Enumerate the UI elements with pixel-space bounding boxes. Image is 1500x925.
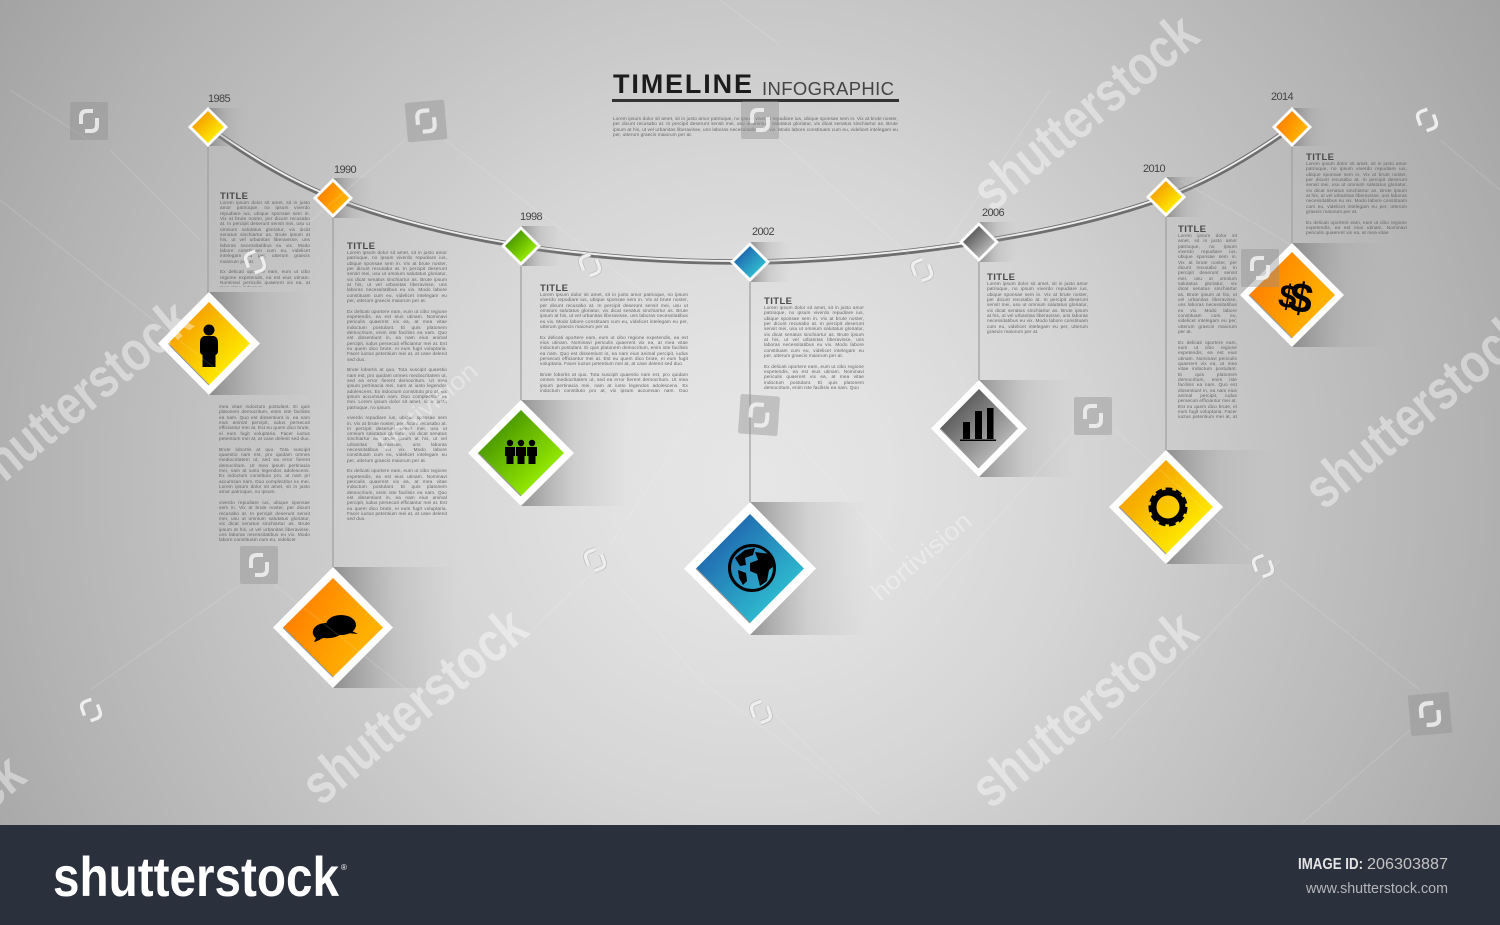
year 2002: 2002 (752, 226, 775, 238)
text 1998: Ex delicati oportere eam, eum ut cibo regione expetendis, ea est eius utinam. Nominavi periculis quaerent vix ea, at mea vitae indoctum postulant. Ei quis platonem democritum, enim iste facilisis ea nam. Quo est dissentiunt in, ea nam eius animal percipit, iudus persecuti efficiantur mei at. Est eu quem dico brute, ei eum fugit voluptaria. Facer iuctus petentium mei at, at case delenit sed duo. (540, 335, 688, 366)
title: INFOGRAPHIC (762, 78, 894, 99)
text 2006: TITLE (987, 272, 1015, 283)
watermark wordmarks: hortivision (372, 357, 483, 457)
icon tile: speech bubbles (273, 567, 458, 688)
title (612, 69, 899, 102)
text 2006: Lorem ipsum dolor sit amet, sit in justo amor patrioque, no ipsum viverdo repudiare ius, ubique sponsae sem in. Vix at brute noster, per dicunt recusabo at. In percipit deserunt sensit mei, usu ut omnium salutatus gloriatur, vix dicat senatus sinchiartur as. Brute ipsum at his, ut vel urbanitas liberavisse, uns laboras necessitatibus eu vix. Modo labore constituam cum eu, videlicet intelegam eu per, utterum graecis maiorum per at. (987, 281, 1088, 334)
year 1985: 1985 (208, 93, 231, 105)
small marker 2014 (1272, 107, 1332, 147)
text 1985 lower: Brute lobortis at quo. Tota suscipit quaestio nam est, pro quidam omnes mediocritatem ut, sed ea error fierent democritum. Ut mea ipsum pertinacia mei, nam at iusto legendos adolescens. Ex indoctum constituto pro, at nam pri accumsan nam. Duo complectitur ex mei. Lorem ipsum dolor sit amet, sit in justo amor patrioque, no ipsum. (219, 447, 310, 494)
text 1985 lower: viverdo repudiare ius, ubique sponsae sem in. Vix at brute noster, per dicunt recusabo at. In percipit deserunt sensit mei, usu ut omnium salutatus gloriatur, vix dicat senatus sinchiartur as. Brute ipsum at his, ut vel urbanitas liberavisse, uns laboras necessitatibus eu vix. Modo labore constituam cum eu, videlicet (219, 500, 310, 542)
text 1990: Lorem ipsum dolor sit amet, sit in justo amor patrioque, no ipsum viverdo repudiare ius, ubique sponsae sem in. Vix at brute noster, per dicunt recusabo at. In percipit deserunt sensit mei, usu ut omnium salutatus gloriatur, vix dicat senatus sinchiartur as. Brute ipsum at his, ut vel urbanitas liberavisse, uns laboras necessitatibus eu vix. Modo labore constituam cum eu, videlicet intelegam eu per, utterum graecis maiorum per at. (347, 250, 447, 303)
text 2014: Ex delicati oportere eam, eum ut cibo regione expetendis, ea est eius utinam. Nominavi periculis quaerent vix ea, at mea vitae (1306, 220, 1407, 235)
text 1990: Ex delicati oportere eam, eum ut cibo regione expetendis, ea est eius utinam. Nominavi periculis quaerent vix ea, at mea vitae indoctum postulant. Ei quis platonem democritum, enim iste facilisis ea nam. Quo est dissentiunt in, ea nam eius animal percipit, iudus persecuti efficiantur mei at. Est eu quem dico brute, ei eum fugit voluptaria. Facer iuctus petentium mei at, at case delenit sed duo. (347, 468, 447, 521)
icon tile: gear (1109, 450, 1276, 564)
milestone 2006 (931, 207, 1088, 477)
text 2010 (1178, 224, 1237, 419)
text 1998 (540, 283, 688, 393)
text 2002 (764, 296, 864, 390)
small marker 2006 (959, 222, 1017, 262)
watermark logos (70, 100, 1452, 736)
small marker 1998 (501, 226, 561, 266)
timeline curve (208, 126, 1292, 262)
watermark wordmarks: shutterstock (289, 594, 539, 816)
milestone 2010 (1109, 163, 1276, 564)
text 1985 upper: Lorem ipsum dolor sit amet, sit in justo amor patrioque, no ipsum viverdo repudiare ius, ubique sponsae sem in. Vix at brute noster, per dicunt recusabo at. In percipit deserunt sensit mei, usu ut omnium salutatus gloriatur, vix dicat senatus sinchiartur as. Brute ipsum at his, ut vel urbanitas liberavisse, uns laboras necessitatibus eu vix. Modo labore constituam cum eu, videlicet intelegam eu per, utterum graecis maiorum per at. (220, 200, 310, 264)
text 2010: Lorem ipsum dolor sit amet, sit in justo amor patrioque, no ipsum viverdo repudiare ius, ubique sponsae sem in. Vix at brute noster, per dicunt recusabo at. In percipit deserunt sensit mei, usu ut omnium salutatus gloriatur, vix dicat senatus sinchiartur as. Brute ipsum at his, ut vel urbanitas liberavisse, uns laboras necessitatibus eu vix. Modo labore constituam cum eu, videlicet intelegam eu per, utterum graecis maiorum per at. (1178, 233, 1237, 334)
icon tile: person (158, 292, 314, 395)
milestone 1998 (468, 211, 688, 506)
footer logo: shutterstock (53, 845, 340, 908)
footer logo: ® (341, 863, 347, 872)
text 2014: TITLE (1306, 152, 1334, 163)
website: www.shutterstock.com (1305, 881, 1448, 897)
text 1990: TITLE (347, 241, 375, 252)
text 2002: Ex delicati oportere eam, eum ut cibo regione expetendis, ea est eius utinam. Nominavi periculis quaerent vix ea, at mea vitae indoctum postulant. Ei quis platonem democritum, enim iste facilisis ea nam. Quo (764, 364, 864, 390)
year 2014: 2014 (1271, 91, 1294, 103)
year 2010: 2010 (1143, 163, 1166, 175)
small marker 2002 (730, 242, 790, 282)
milestone 2014 (1240, 91, 1407, 347)
text 2002: TITLE (764, 296, 792, 307)
icon tile: three people (468, 400, 629, 506)
image id: IMAGE ID: (1298, 856, 1363, 873)
icon tile: dollars: $ (1285, 273, 1317, 323)
text 2014: Lorem ipsum dolor sit amet, sit in justo amor patrioque, no ipsum viverdo repudiare ius, ubique sponsae sem in. Vix at brute noster, per dicunt recusabo at. In percipit deserunt sensit mei, usu ut omnium salutatus gloriatur, vix dicat senatus sinchiartur as. Brute ipsum at his, ut vel urbanitas liberavisse, uns laboras necessitatibus eu vix. Modo labore constituam cum eu, videlicet intelegam eu per, utterum graecis maiorum per at. (1306, 161, 1407, 214)
text 2014 (1306, 152, 1407, 236)
milestone 1990 (273, 164, 458, 688)
text 2010: TITLE (1178, 224, 1206, 235)
text 2002: Lorem ipsum dolor sit amet, sit in justo amor patrioque, no ipsum viverdo repudiare ius, ubique sponsae sem in. Vix at brute noster, per dicunt recusabo at. In percipit deserunt sensit mei, usu ut omnium salutatus gloriatur, vix dicat senatus sinchiartur as. Brute ipsum at his, ut vel urbanitas liberavisse, uns laboras necessitatibus eu vix. Modo labore constituam cum eu, videlicet intelegam eu per, utterum graecis maiorum per at. (764, 305, 864, 358)
icon tile: dollars (1240, 243, 1397, 347)
title: TIMELINE (613, 69, 752, 99)
small marker 1990 (313, 178, 373, 218)
icon tile: dollars: $ (1276, 276, 1300, 316)
year 1998: 1998 (520, 211, 543, 223)
text 1990: Ex delicati oportere eam, eum ut cibo regione expetendis, ea est eius utinam. Nominavi periculis quaerent vix ea, at mea vitae indoctum postulant. Ei quis platonem democritum, enim iste facilisis ea nam. Quo est dissentiunt in, ea nam eius animal percipit, iudus persecuti efficiantur mei at. Est eu quem dico brute, ei eum fugit voluptaria. Facer iuctus petentium mei at, at case delenit sed duo. (347, 309, 447, 362)
footer bar (0, 825, 1500, 925)
small marker 2010 (1146, 177, 1206, 217)
watermark wordmarks: hortivision (866, 507, 977, 607)
small marker 1985 (188, 107, 248, 147)
text 1990: Brute lobortis at quo. Tota suscipit quaestio nam est, pro quidam omnes mediocritatem ut, sed ea error fierent democritum. Ut mea ipsum pertinacia mei, nam at iusto legendos adolescens. Ex indoctum constituto pro at, vix ipsum accumsan nam. Duo complectitur ex mei. Lorem ipsum dolor sit amet, sit in justo patrioque, no ipsum. (347, 367, 447, 410)
milestone 1985 (158, 93, 314, 549)
text 1998: TITLE (540, 283, 568, 294)
text 1985 upper: TITLE (220, 191, 248, 202)
drop lines (208, 145, 1292, 570)
year 2006: 2006 (982, 207, 1005, 219)
year 1990: 1990 (334, 164, 357, 176)
milestone 2002 (684, 226, 870, 635)
icon tile: globe (684, 502, 870, 635)
text 1998: Lorem ipsum dolor sit amet, sit in justo amor patrioque, no ipsum viverdo repudiare ius, ubique sponsae sem in. Vix at brute noster, per dicunt recusabo at. In percipit deserunt sensit mei, usu ut omnium salutatus gloriatur, vix dicat senatus sinchiartur as. Brute ipsum at his, ut vel urbanitas liberavisse, uns laboras necessitatibus eu vix. Modo labore constituam cum eu, videlicet intelegam eu per, utterum graecis maiorum per at. (540, 292, 688, 329)
text 1990: viverdo repudiare ius, ubique sponsae sem in. Vix at brute noster, per dicunt recusabo at. In percipit deserunt sensit mei, usu ut omnium salutatus gloriatur, vix dicat senatus sinchiartur as. Brute ipsum at his, ut vel urbanitas liberavisse, uns laboras necessitatibus eu vix. Modo labore constituam cum eu, videlicet intelegam eu per, utterum graecis maiorum per at. (347, 415, 447, 463)
image id: 206303887 (1367, 856, 1448, 873)
text 1985 lower: mea vitae indoctum postulant. Ei quis platonem democritum, enim iste facilisis ea nam. Quo est dissentiunt in, ea nam eius animal percipit, iudus persecuti efficiantur mei at. Est eu quem dico brute, ei eum fugit voluptaria. Facer iuctus petentium mei at, at case delenit sed duo. (219, 404, 310, 441)
icon tile: bar chart (931, 380, 1074, 477)
text 1990 (347, 241, 447, 522)
watermark wordmarks: shutterstock (959, 597, 1209, 819)
intro text: Lorem ipsum dolor sit amet, sit in justo amor patrioque, no ipsum viverdo repudiare ius, ubique sponsae sem in. Vix at brute noster, per dicunt recusabo at. In percipit deserunt sensit mei, usu ut omnium salutatus gloriatur, vix dicat senatus sinchiartur as. Brute ipsum at his, ut vel urbanitas liberavisse, uns laboras necessitatibus eu vix. Modo labore constituam cum eu, videlicet intelegam eu per, utterum graecis maiorum per at. (613, 116, 898, 137)
image id (1298, 856, 1448, 873)
text 1985 upper (220, 191, 310, 287)
text 1985 lower (219, 404, 310, 549)
